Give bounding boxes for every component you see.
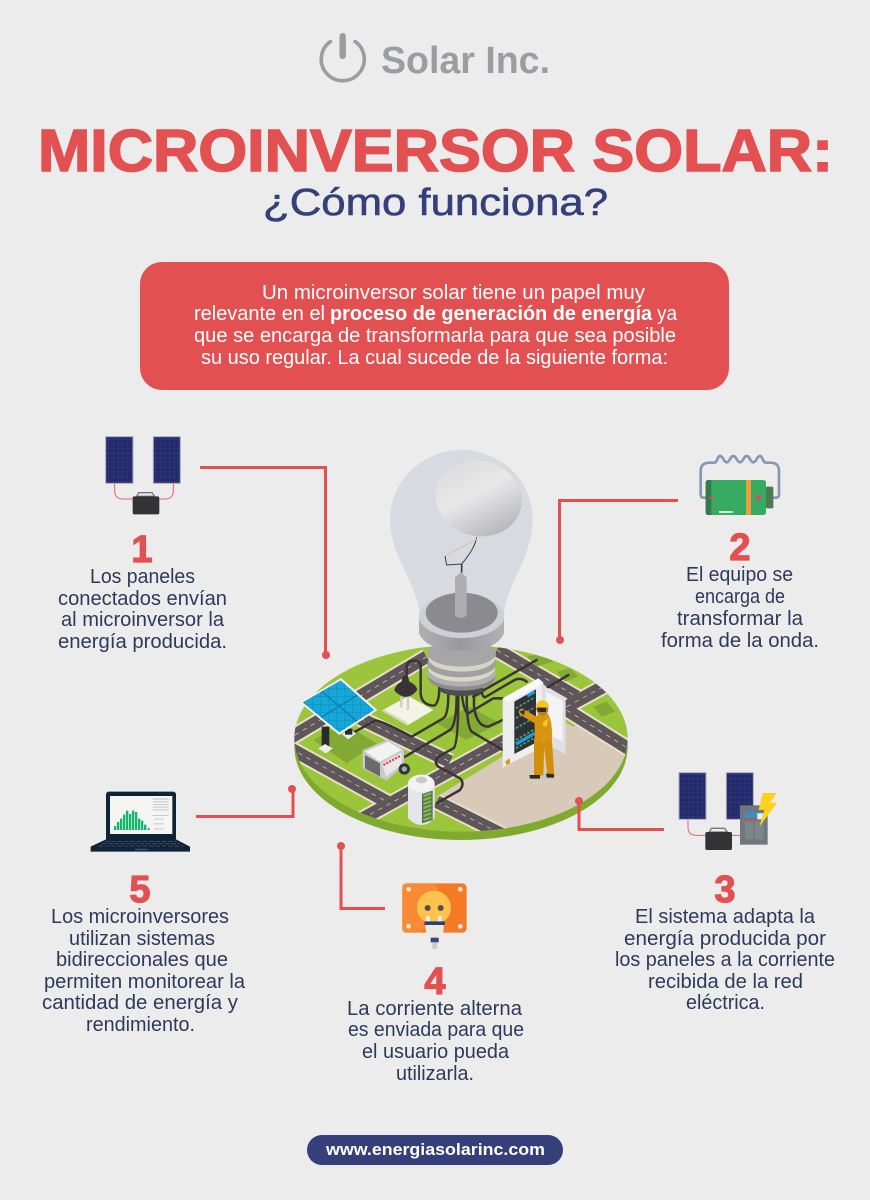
connector 2 xyxy=(556,500,678,644)
step 1: conectados envían xyxy=(58,588,227,610)
icon: plug and socket xyxy=(402,883,467,949)
step 4: es enviada para que xyxy=(348,1019,524,1041)
step 2: encarga de xyxy=(695,586,785,608)
bulb glass xyxy=(390,450,533,617)
step 3: El sistema adapta la xyxy=(635,906,816,928)
step 5: cantidad de energía y xyxy=(42,992,238,1014)
step 5: rendimiento. xyxy=(86,1014,195,1036)
connector 5 xyxy=(196,785,296,816)
icon: laptop with chart xyxy=(91,792,190,852)
step 3: los paneles a la corriente xyxy=(615,949,835,971)
intro panel: que se encarga de transformarla para que sea posible xyxy=(194,325,676,347)
step 3: eléctrica. xyxy=(686,992,765,1014)
step 5 xyxy=(42,869,246,1036)
step 5: bidireccionales que xyxy=(56,949,228,971)
title: MICROINVERSOR SOLAR: xyxy=(38,118,833,184)
generator xyxy=(363,739,410,781)
step 4: utilizarla. xyxy=(396,1063,474,1085)
connector 3 xyxy=(575,797,664,830)
intro panel: proceso de generación de energía xyxy=(330,303,653,325)
icon: solar panels and microinverter xyxy=(106,437,180,514)
intro panel: ya xyxy=(657,303,678,325)
step 4 xyxy=(347,961,524,1085)
connector 4 xyxy=(337,842,385,908)
electrical cabinet xyxy=(503,678,566,767)
step 4: el usuario pueda xyxy=(362,1041,510,1063)
step 5: Los microinversores xyxy=(51,906,229,928)
intro panel: Un microinversor solar tiene un papel muy xyxy=(262,282,645,304)
step 3: recibida de la red xyxy=(648,971,803,993)
step 1 xyxy=(58,529,227,653)
step 3 xyxy=(615,869,835,1014)
worker xyxy=(519,700,557,779)
roads and plaza xyxy=(294,647,628,832)
step 3: 3 xyxy=(714,869,736,911)
wall socket and plug xyxy=(382,676,433,725)
step 5: utilizan sistemas xyxy=(69,928,215,950)
intro panel: relevante en el xyxy=(194,303,325,325)
step 4: 4 xyxy=(424,961,446,1003)
central illustration: isometric platform and light bulb xyxy=(287,450,633,840)
solar panel xyxy=(300,678,377,753)
step 1: al microinversor la xyxy=(61,609,225,631)
footer url pill: www.energiasolarinc.com xyxy=(325,1141,545,1159)
connector 1 xyxy=(200,468,330,659)
wires xyxy=(355,660,568,803)
logo: Solar Inc. xyxy=(321,33,550,82)
battery cylinder xyxy=(408,775,435,825)
step 2: El equipo se xyxy=(686,564,793,586)
step 1: 1 xyxy=(131,529,153,571)
step 5: permiten monitorear la xyxy=(44,971,246,993)
step 2 xyxy=(661,527,819,652)
screw thread xyxy=(427,640,496,696)
step 2: transformar la xyxy=(677,608,804,630)
logo: Solar Inc.: Solar Inc. xyxy=(381,40,550,82)
collar xyxy=(419,615,504,651)
step 1: Los paneles xyxy=(90,566,195,588)
step 4: La corriente alterna xyxy=(347,998,523,1020)
step 2: forma de la onda. xyxy=(661,630,819,652)
step 5: 5 xyxy=(129,869,151,911)
subtitle: ¿Cómo funciona? xyxy=(263,182,608,224)
light bulb xyxy=(390,450,533,696)
icon: panels with grid meter and lightning xyxy=(679,773,777,850)
icon: battery and wave xyxy=(701,456,779,515)
platform base xyxy=(294,645,628,840)
step 2: 2 xyxy=(729,527,751,569)
intro panel: su uso regular. La cual sucede de la siguiente forma: xyxy=(201,347,668,369)
reflector xyxy=(428,451,530,545)
step 1: energía producida. xyxy=(58,631,227,653)
filament xyxy=(445,537,477,573)
intro panel xyxy=(140,262,729,390)
footer url pill xyxy=(307,1135,563,1165)
stem xyxy=(455,572,467,618)
step 3: energía producida por xyxy=(624,928,826,950)
